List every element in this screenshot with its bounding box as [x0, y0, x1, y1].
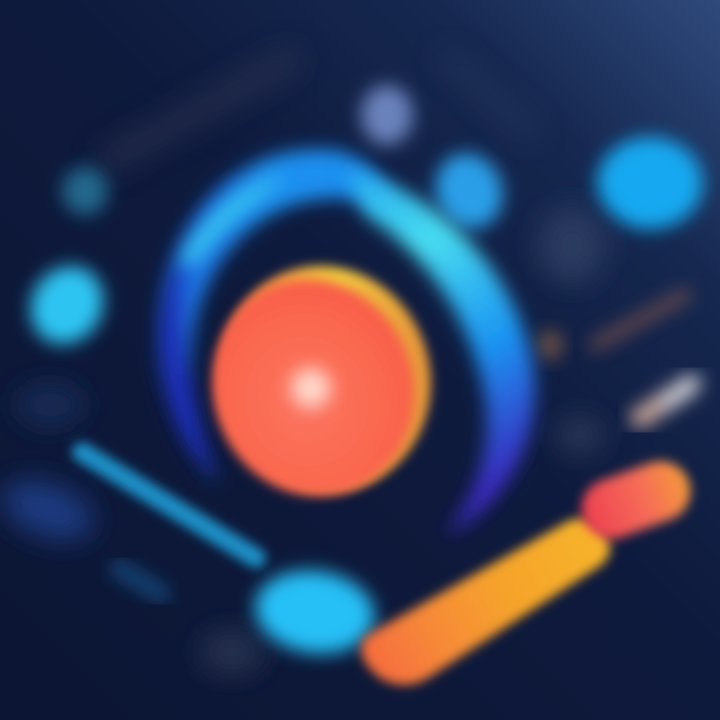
faint diagonal line top center [450, 60, 530, 130]
dot: cyan left [17, 253, 117, 357]
dot: blue top center [425, 144, 513, 238]
faint diagonal line top left [110, 60, 290, 160]
dark blue block lower left [0, 469, 102, 551]
orange dim line right [595, 295, 685, 345]
disc red face [184, 253, 442, 523]
dot: dim teal upper left [62, 167, 108, 215]
dim blue dash lower left [118, 568, 162, 594]
dim blue block left [15, 383, 85, 427]
orange dim dot right [537, 330, 563, 360]
dim grey shape right [538, 207, 606, 283]
dim grey dot bottom [200, 630, 264, 674]
dim shape lower right [556, 417, 604, 453]
disc yellow rim [192, 238, 460, 518]
ring arc: blue left side [158, 150, 395, 480]
red and orange pill right [573, 453, 699, 547]
ring arc: cyan right side [345, 170, 535, 535]
peach and white streak right [640, 382, 694, 418]
central disc [184, 238, 460, 523]
dot: slate blue top [361, 85, 413, 145]
dot: bright blue top right [597, 137, 703, 229]
blue diagonal bar [82, 452, 256, 558]
disc white highlight [291, 368, 331, 408]
cyan lozenge bottom [250, 563, 380, 661]
orange diagonal bar [361, 518, 610, 685]
